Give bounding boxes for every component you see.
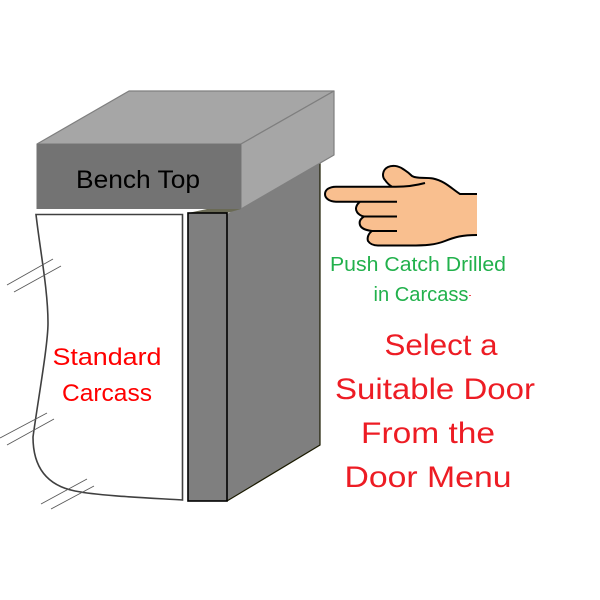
select a suitable door instruction bbox=[335, 329, 535, 494]
push catch label: in Carcass bbox=[374, 284, 468, 306]
select a suitable door instruction: Select a bbox=[384, 329, 498, 362]
carcass side panel bbox=[188, 160, 320, 501]
bench top block bbox=[36, 91, 334, 209]
bench top front bbox=[36, 144, 241, 209]
bench top side bbox=[241, 91, 334, 209]
standard carcass label: Standard bbox=[52, 344, 162, 371]
carcass front edge bbox=[188, 213, 227, 501]
standard carcass torn panel bbox=[33, 214, 182, 500]
standard carcass label: Carcass bbox=[62, 380, 152, 407]
select a suitable door instruction: Suitable Door bbox=[335, 373, 535, 406]
bench top surface bbox=[37, 91, 334, 144]
push catch label: Push Catch Drilled bbox=[330, 254, 506, 276]
bench top label: Bench Top bbox=[76, 166, 200, 194]
icon: pointing hand bbox=[325, 166, 477, 246]
break marks bbox=[0, 259, 94, 509]
push catch label bbox=[330, 254, 506, 306]
small red dash bbox=[469, 294, 471, 296]
select a suitable door instruction: From the bbox=[361, 417, 495, 450]
standard carcass label bbox=[52, 344, 162, 407]
select a suitable door instruction: Door Menu bbox=[344, 461, 512, 494]
